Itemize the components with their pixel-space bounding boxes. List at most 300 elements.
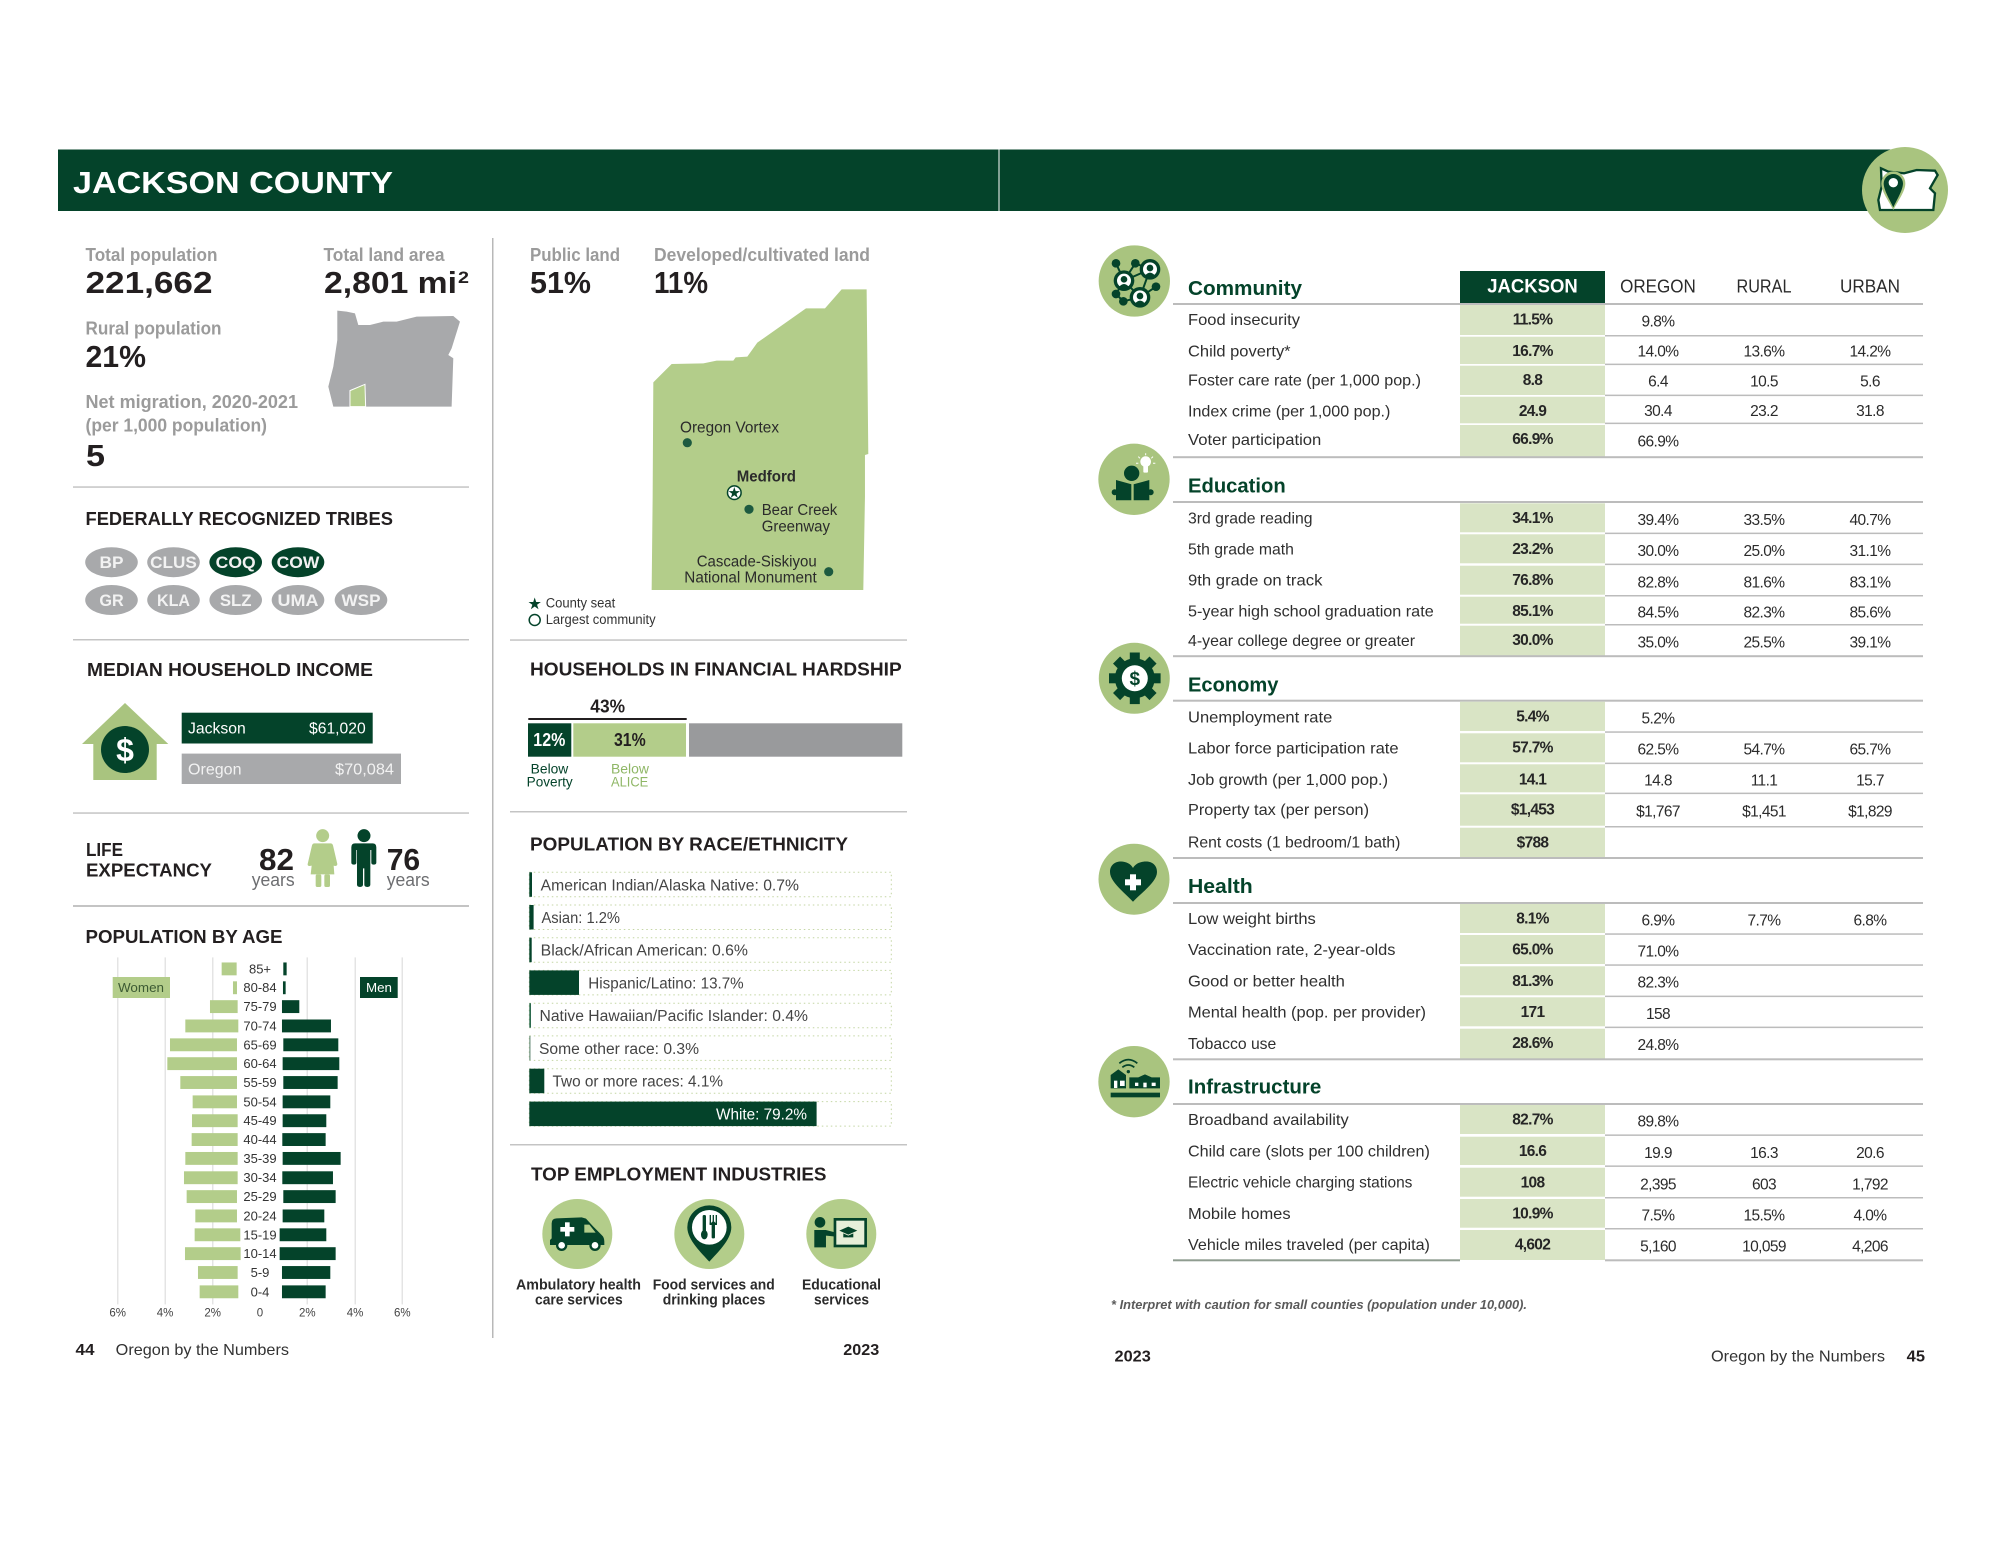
row: Index crime: 24.9 bbox=[1519, 403, 1547, 420]
table: column headers: RURAL bbox=[1736, 277, 1792, 297]
tribe pills: WSP bbox=[342, 591, 380, 610]
icon: gear with dollar: $ bbox=[1130, 669, 1141, 690]
row: Unemployment rate: Unemployment rate bbox=[1188, 709, 1332, 726]
stat: total population: 221,662 bbox=[86, 265, 212, 300]
row: Two or more races: Two or more races: 4.1% bbox=[552, 1074, 723, 1091]
row: high school graduation bbox=[1188, 597, 1923, 626]
row: Vehicle miles traveled bbox=[1173, 1230, 1923, 1261]
tribe pills bbox=[85, 547, 387, 615]
row: EV charging stations: 2,395 bbox=[1640, 1176, 1676, 1193]
row: Mental health: 171 bbox=[1521, 1004, 1545, 1021]
row: White bbox=[529, 1102, 891, 1126]
row: 9th grade on track: 76.8% bbox=[1512, 572, 1554, 589]
icon: reader with light bulb bbox=[1098, 444, 1170, 515]
row: Unemployment rate: 5.4% bbox=[1516, 709, 1550, 726]
title: JACKSON COUNTY bbox=[73, 165, 393, 200]
legend: men bbox=[360, 977, 398, 998]
row: Vaccination rate bbox=[1188, 935, 1923, 966]
age labels: 25-29 bbox=[243, 1189, 277, 1204]
row: college degree: 4-year college degree or greater bbox=[1188, 633, 1416, 650]
icon: gear with dollar bbox=[1099, 643, 1170, 714]
row: Foster care rate: 6.4 bbox=[1648, 374, 1669, 391]
map label: Cascade-Siskiyou National Monument: National Monument bbox=[684, 570, 817, 587]
row: Voter participation bbox=[1173, 425, 1923, 458]
row: Hispanic/Latino: Hispanic/Latino: 13.7% bbox=[588, 975, 744, 992]
x axis labels: 6% bbox=[109, 1308, 126, 1320]
row: Foster care rate: 8.8 bbox=[1523, 372, 1543, 389]
stat: total population bbox=[86, 245, 218, 300]
row: Child care: 16.6 bbox=[1519, 1143, 1547, 1160]
x axis labels: 2% bbox=[204, 1308, 221, 1320]
icon: teacher at board bbox=[806, 1199, 876, 1269]
stat: total land area: 2,801 mi bbox=[324, 265, 457, 300]
row: Voter participation: Voter participation bbox=[1188, 432, 1321, 449]
row: Vehicle miles traveled: 4,602 bbox=[1515, 1236, 1550, 1254]
heading: Health bbox=[1188, 876, 1253, 898]
stat: total land area bbox=[324, 245, 469, 300]
stat: net migration bbox=[86, 392, 298, 473]
row: Child poverty bbox=[1188, 337, 1923, 365]
row: Voter participation: 66.9% bbox=[1638, 434, 1679, 451]
row: Index crime: Index crime (per 1,000 pop.) bbox=[1188, 404, 1390, 421]
row: high school graduation: 82.3% bbox=[1744, 604, 1785, 621]
stat: public land: Public land bbox=[530, 245, 620, 265]
row: Tobacco use: 24.8% bbox=[1638, 1037, 1679, 1054]
icon: community network bbox=[1099, 245, 1170, 317]
age labels: 30-34 bbox=[243, 1170, 277, 1185]
row: Good or better health bbox=[1188, 966, 1923, 997]
total bracket 43%: 43% bbox=[590, 696, 625, 716]
row: Vaccination rate: 71.0% bbox=[1638, 944, 1679, 961]
row: 3rd grade reading: 34.1% bbox=[1512, 510, 1554, 527]
row: Child care bbox=[1188, 1137, 1923, 1167]
row: Labor force participation: Labor force participation rate bbox=[1188, 740, 1399, 757]
stat: rural population: Rural population bbox=[86, 318, 222, 338]
row: 3rd grade reading: 3rd grade reading bbox=[1188, 510, 1312, 527]
icon: fork and spoon pin bbox=[674, 1199, 744, 1269]
icon: house with dollar sign: $ bbox=[116, 732, 134, 768]
footer: left page year: 2023 bbox=[843, 1342, 879, 1359]
tribe pills: KLA bbox=[157, 591, 190, 610]
women life expectancy value: years bbox=[252, 870, 295, 890]
icon: Oregon map with location pin bbox=[1862, 147, 1948, 233]
row: Property tax: $1,453 bbox=[1511, 801, 1555, 818]
row: high school graduation: 85.6% bbox=[1850, 604, 1891, 621]
row: Some other race bbox=[529, 1036, 891, 1060]
icon: house with dollar sign bbox=[82, 703, 168, 780]
row: Index crime bbox=[1188, 397, 1923, 424]
row: Black/African American: Black/African American: 0.6% bbox=[541, 943, 748, 960]
stat: net migration: Net migration, 2020-2021 bbox=[86, 392, 298, 412]
row: 3rd grade reading: 39.4% bbox=[1638, 512, 1679, 529]
row: Labor force participation bbox=[1188, 733, 1923, 764]
age labels: 55-59 bbox=[243, 1075, 277, 1090]
map legend: County seat bbox=[546, 596, 616, 610]
row: EV charging stations: 1,792 bbox=[1852, 1176, 1888, 1193]
row: Broadband availability: 82.7% bbox=[1512, 1112, 1554, 1128]
men bars bbox=[280, 962, 341, 1298]
heading: POPULATION BY AGE bbox=[86, 926, 282, 947]
row: White: White: 79.2% bbox=[716, 1107, 807, 1124]
panel: population by race/ethnicity bbox=[529, 834, 891, 1126]
section: Community bbox=[1099, 245, 1923, 458]
row: high school graduation: 84.5% bbox=[1638, 604, 1679, 621]
row: Property tax: Property tax (per person) bbox=[1188, 802, 1369, 819]
row: Labor force participation: 54.7% bbox=[1744, 742, 1785, 759]
footer: left page number: 44 bbox=[76, 1342, 95, 1359]
heading: EXPECTANCY bbox=[86, 860, 213, 880]
women life expectancy value bbox=[252, 842, 295, 890]
row: Hispanic/Latino bbox=[529, 970, 891, 995]
row: high school graduation: 85.1% bbox=[1512, 603, 1554, 620]
row: Native Hawaiian/Pacific Islander bbox=[529, 1003, 891, 1028]
row: Child poverty: 14.2% bbox=[1850, 344, 1891, 361]
x axis labels: 0 bbox=[257, 1308, 263, 1320]
row: Labor force participation: 57.7% bbox=[1512, 740, 1554, 757]
row: Mental health: 158 bbox=[1646, 1006, 1670, 1023]
row: Rent costs bbox=[1173, 828, 1923, 859]
stat: rural population: 21% bbox=[86, 339, 146, 374]
table: column headers: OREGON bbox=[1620, 277, 1696, 297]
age labels: 70-74 bbox=[243, 1018, 277, 1034]
row: Food insecurity: 9.8% bbox=[1642, 314, 1675, 331]
age labels: 60-64 bbox=[243, 1056, 277, 1071]
row: 3rd grade reading: 33.5% bbox=[1744, 512, 1785, 529]
stat: total land area: 2 bbox=[458, 268, 469, 287]
row: EV charging stations: Electric vehicle charging stations bbox=[1188, 1175, 1412, 1192]
row: high school graduation: 5-year high school graduation rate bbox=[1188, 604, 1434, 621]
row: American Indian/Alaska Native: American Indian/Alaska Native: 0.7% bbox=[541, 878, 799, 894]
stat: rural population bbox=[86, 318, 222, 374]
map label: Oregon Vortex bbox=[680, 420, 779, 447]
men life expectancy value bbox=[387, 842, 430, 890]
panel: federally recognized tribes bbox=[85, 508, 393, 615]
women bars bbox=[167, 962, 241, 1298]
row: college degree bbox=[1173, 626, 1923, 657]
row: Foster care rate bbox=[1188, 366, 1923, 396]
age labels: 75-79 bbox=[243, 999, 277, 1014]
row: Tobacco use: Tobacco use bbox=[1188, 1036, 1276, 1053]
stat: developed land: Developed/cultivated land bbox=[654, 245, 870, 265]
tribe pills: BP bbox=[100, 553, 124, 572]
row: Black/African American bbox=[529, 938, 891, 962]
row: Job growth: 15.7 bbox=[1856, 773, 1884, 790]
bar: below ALICE: ALICE bbox=[611, 775, 648, 790]
row: Index crime: 31.8 bbox=[1856, 403, 1884, 420]
row: 3rd grade reading: 40.7% bbox=[1850, 512, 1891, 529]
legend: women bbox=[113, 977, 170, 998]
label: food services and drinking places bbox=[653, 1277, 775, 1308]
row: Mobile homes: 15.5% bbox=[1744, 1208, 1785, 1225]
footer: right page: 45 bbox=[1907, 1349, 1925, 1366]
map: Jackson County bbox=[652, 289, 868, 590]
row: Low weight births: Low weight births bbox=[1188, 911, 1316, 928]
heading: Community bbox=[1188, 278, 1303, 300]
table: column headers: URBAN bbox=[1840, 277, 1900, 297]
row: Child care: Child care (slots per 100 children) bbox=[1188, 1144, 1430, 1161]
row: Low weight births: 6.9% bbox=[1642, 913, 1675, 930]
stat: net migration: 5 bbox=[86, 438, 105, 473]
bar: Jackson income: Jackson bbox=[188, 720, 246, 738]
footer: left page number: Oregon by the Numbers bbox=[116, 1342, 289, 1359]
heading bbox=[86, 839, 213, 880]
age labels: 45-49 bbox=[243, 1113, 277, 1128]
row: EV charging stations bbox=[1188, 1168, 1923, 1198]
row: Child care: 19.9 bbox=[1644, 1145, 1672, 1162]
row: 5th grade math: 23.2% bbox=[1512, 541, 1554, 558]
x axis labels: 4% bbox=[157, 1308, 173, 1320]
row: college degree: 35.0% bbox=[1638, 634, 1679, 651]
row: Job growth: 11.1 bbox=[1751, 773, 1777, 790]
panel: households in financial hardship bbox=[527, 659, 902, 790]
tribe pills: CLUS bbox=[150, 553, 197, 572]
row: Job growth: 14.1 bbox=[1519, 771, 1547, 788]
tribe pills: COW bbox=[277, 553, 320, 572]
row: 3rd grade reading bbox=[1188, 503, 1923, 534]
row: Index crime: 23.2 bbox=[1750, 403, 1778, 420]
row: Labor force participation: 65.7% bbox=[1850, 742, 1891, 759]
row: Job growth: 14.8 bbox=[1644, 773, 1672, 790]
row: Child care: 16.3 bbox=[1750, 1145, 1778, 1162]
row: Mobile homes bbox=[1188, 1199, 1923, 1230]
stat: total land area: Total land area bbox=[324, 245, 445, 265]
row: Job growth bbox=[1188, 764, 1923, 794]
bar: below poverty: Below bbox=[531, 761, 569, 776]
panel: key county statistics bbox=[86, 245, 469, 473]
row: Job growth: Job growth (per 1,000 pop.) bbox=[1188, 772, 1388, 789]
row: Vehicle miles traveled: 10,059 bbox=[1742, 1239, 1786, 1256]
row: Child poverty: Child poverty* bbox=[1188, 344, 1291, 361]
age labels: 40-44 bbox=[243, 1132, 277, 1147]
footnote: * Interpret with caution for small counties (population under 10,000). bbox=[1111, 1297, 1527, 1312]
stat: developed land bbox=[654, 245, 870, 300]
row: Low weight births bbox=[1188, 904, 1923, 935]
age labels: 50-54 bbox=[243, 1094, 277, 1109]
row: Mobile homes: 10.9% bbox=[1512, 1206, 1554, 1222]
row: Property tax: $1,767 bbox=[1636, 804, 1680, 821]
section: Economy bbox=[1099, 643, 1923, 859]
row: college degree: 30.0% bbox=[1512, 632, 1554, 649]
age labels: 5-9 bbox=[251, 1265, 269, 1280]
map label: Medford county seat bbox=[728, 469, 796, 500]
map label: Bear Creek Greenway: Bear Creek bbox=[762, 502, 838, 519]
row: college degree: 25.5% bbox=[1744, 634, 1785, 651]
heading: Economy bbox=[1188, 675, 1279, 697]
women life expectancy value: 82 bbox=[259, 842, 294, 877]
map label: Oregon Vortex: Oregon Vortex bbox=[680, 420, 779, 437]
row: Tobacco use bbox=[1173, 1029, 1923, 1060]
men life expectancy value: years bbox=[387, 870, 430, 890]
bar: below ALICE: 31% bbox=[614, 730, 646, 750]
label: ambulatory health care services: care services bbox=[535, 1292, 623, 1308]
label: food services and drinking places: drinking places bbox=[663, 1292, 765, 1308]
row: Low weight births: 8.1% bbox=[1516, 911, 1550, 928]
bar: below ALICE bbox=[573, 723, 686, 790]
bar: below poverty: Poverty bbox=[527, 775, 573, 790]
row: American Indian/Alaska Native bbox=[529, 872, 891, 897]
legend: women: Women bbox=[118, 980, 164, 995]
label: ambulatory health care services: Ambulatory health bbox=[516, 1277, 641, 1293]
row: Asian bbox=[529, 905, 891, 930]
age labels: 15-19 bbox=[243, 1227, 277, 1242]
men life expectancy value: 76 bbox=[387, 842, 420, 877]
x axis labels bbox=[109, 1308, 411, 1320]
heading: HOUSEHOLDS IN FINANCIAL HARDSHIP bbox=[530, 659, 902, 680]
row: Child poverty: 14.0% bbox=[1638, 344, 1679, 361]
bar: below poverty bbox=[527, 723, 573, 790]
icon: heart with cross bbox=[1098, 844, 1170, 915]
panel: top employment industries bbox=[516, 1164, 881, 1308]
map label: Cascade-Siskiyou National Monument bbox=[684, 554, 833, 587]
row: Voter participation: 66.9% bbox=[1512, 431, 1554, 448]
row: Mental health: Mental health (pop. per provider) bbox=[1188, 1005, 1426, 1022]
row: Some other race: Some other race: 0.3% bbox=[539, 1041, 699, 1058]
stat: total population: Total population bbox=[86, 245, 218, 265]
row: Tobacco use: 28.6% bbox=[1512, 1035, 1554, 1052]
row: Foster care rate: 10.5 bbox=[1750, 374, 1778, 391]
row: Broadband availability: Broadband availability bbox=[1188, 1112, 1349, 1129]
bar: below ALICE: Below bbox=[611, 761, 649, 776]
row: Foster care rate: 5.6 bbox=[1860, 374, 1880, 391]
table: column headers: JACKSON bbox=[1487, 277, 1578, 298]
icon: man bbox=[351, 829, 376, 887]
x axis labels: 6% bbox=[394, 1308, 411, 1320]
icon: ambulance bbox=[542, 1199, 612, 1269]
bar: Jackson income bbox=[182, 713, 373, 744]
row: Good or better health: Good or better health bbox=[1188, 974, 1345, 991]
icon: woman bbox=[308, 829, 337, 887]
row: Food insecurity: 11.5% bbox=[1513, 311, 1553, 328]
legend: men: Men bbox=[366, 980, 392, 995]
map legend bbox=[529, 596, 656, 627]
age labels bbox=[243, 962, 277, 1299]
row: Unemployment rate bbox=[1188, 702, 1923, 733]
x axis labels: 4% bbox=[347, 1308, 363, 1320]
bar: Jackson income: $61,020 bbox=[309, 720, 366, 738]
bar: Oregon income: Oregon bbox=[188, 762, 242, 778]
tribe pills: UMA bbox=[278, 591, 318, 610]
heading: FEDERALLY RECOGNIZED TRIBES bbox=[86, 508, 393, 529]
label: educational services bbox=[802, 1277, 881, 1308]
row: Foster care rate: Foster care rate (per 1,000 pop.) bbox=[1188, 373, 1421, 390]
map label: Bear Creek Greenway bbox=[744, 502, 838, 536]
row: Food insecurity: Food insecurity bbox=[1188, 312, 1300, 329]
label: educational services: Educational bbox=[802, 1277, 881, 1293]
row: 9th grade on track: 9th grade on track bbox=[1188, 573, 1323, 590]
age labels: 35-39 bbox=[243, 1151, 277, 1166]
row: Two or more races bbox=[529, 1069, 891, 1093]
section: Health bbox=[1098, 844, 1923, 1060]
row: 5th grade math: 5th grade math bbox=[1188, 541, 1294, 558]
age labels: 0-4 bbox=[251, 1284, 269, 1299]
row: 9th grade on track bbox=[1188, 566, 1923, 596]
row: 5th grade math: 31.1% bbox=[1850, 543, 1891, 560]
row: Food insecurity bbox=[1188, 305, 1923, 336]
age labels: 85+ bbox=[249, 962, 271, 976]
row: Vehicle miles traveled: Vehicle miles traveled (per capita) bbox=[1188, 1237, 1430, 1254]
bar: Oregon income bbox=[182, 754, 401, 784]
footer: right page: Oregon by the Numbers bbox=[1711, 1349, 1885, 1366]
panel: population by age bbox=[86, 926, 411, 1320]
chart: population pyramid bars bbox=[167, 962, 341, 1298]
row: Broadband availability: 89.8% bbox=[1638, 1114, 1679, 1131]
footer: right page: 2023 bbox=[1114, 1349, 1151, 1366]
bar: below poverty: 12% bbox=[533, 730, 565, 750]
stat: public land: 51% bbox=[530, 265, 591, 300]
x axis labels: 2% bbox=[299, 1308, 316, 1320]
header banner bbox=[58, 150, 1896, 211]
row: 9th grade on track: 82.8% bbox=[1638, 574, 1679, 591]
age labels: 65-69 bbox=[243, 1037, 277, 1052]
row: Unemployment rate: 5.2% bbox=[1642, 710, 1675, 727]
row: Property tax: $1,829 bbox=[1848, 804, 1892, 821]
row: Mobile homes: Mobile homes bbox=[1188, 1206, 1291, 1223]
panel: land use bbox=[529, 245, 870, 627]
row: Vaccination rate: 65.0% bbox=[1512, 942, 1554, 959]
row: Child poverty: 16.7% bbox=[1512, 343, 1554, 360]
row: Low weight births: 6.8% bbox=[1854, 913, 1887, 930]
row: Good or better health: 82.3% bbox=[1638, 975, 1679, 992]
row: Index crime: 30.4 bbox=[1644, 403, 1673, 420]
panel: life expectancy bbox=[86, 829, 430, 890]
panel: median household income bbox=[82, 659, 401, 784]
table: column headers bbox=[1460, 271, 1900, 303]
map label: Medford county seat: Medford bbox=[737, 469, 796, 486]
row: Vehicle miles traveled: 4,206 bbox=[1852, 1239, 1888, 1256]
section: Infrastructure bbox=[1098, 1046, 1923, 1261]
stat: net migration: (per 1,000 population) bbox=[86, 416, 267, 436]
heading: POPULATION BY RACE/ETHNICITY bbox=[530, 834, 849, 855]
section: Education bbox=[1098, 444, 1923, 657]
tribe pills: GR bbox=[99, 591, 124, 610]
row: Vaccination rate: Vaccination rate, 2-year-olds bbox=[1188, 942, 1395, 959]
age labels: 80-84 bbox=[243, 980, 277, 995]
map label: Cascade-Siskiyou National Monument: Cascade-Siskiyou bbox=[697, 554, 817, 571]
row: EV charging stations: 108 bbox=[1521, 1174, 1545, 1191]
age labels: 10-14 bbox=[243, 1246, 277, 1261]
row: Child care: 20.6 bbox=[1856, 1145, 1884, 1162]
bar: remainder bbox=[689, 723, 902, 757]
label: educational services: services bbox=[814, 1292, 869, 1308]
row: 5th grade math bbox=[1188, 534, 1923, 565]
footer: right page bbox=[1114, 1349, 1925, 1366]
bar: Oregon income: $70,084 bbox=[335, 762, 394, 778]
row: college degree: 39.1% bbox=[1850, 634, 1891, 651]
row: Native Hawaiian/Pacific Islander: Native Hawaiian/Pacific Islander: 0.4% bbox=[540, 1008, 808, 1025]
age labels: 20-24 bbox=[243, 1208, 277, 1224]
row: Rent costs: Rent costs (1 bedroom/1 bath) bbox=[1188, 834, 1400, 851]
row: Mobile homes: 4.0% bbox=[1854, 1208, 1887, 1225]
row: Labor force participation: 62.5% bbox=[1638, 742, 1679, 759]
heading: TOP EMPLOYMENT INDUSTRIES bbox=[531, 1164, 826, 1185]
label: ambulatory health care services bbox=[516, 1277, 641, 1308]
row: 9th grade on track: 81.6% bbox=[1744, 574, 1785, 591]
row: Mobile homes: 7.5% bbox=[1642, 1208, 1675, 1225]
row: 5th grade math: 25.0% bbox=[1744, 543, 1785, 560]
row: 5th grade math: 30.0% bbox=[1638, 543, 1679, 560]
heading: MEDIAN HOUSEHOLD INCOME bbox=[87, 659, 373, 680]
heading: Infrastructure bbox=[1188, 1076, 1321, 1098]
icon: connected buildings bbox=[1098, 1046, 1170, 1117]
map label: Bear Creek Greenway: Greenway bbox=[762, 519, 830, 536]
tribe pills: COQ bbox=[216, 553, 256, 572]
heading: Education bbox=[1188, 475, 1286, 497]
heading: LIFE bbox=[86, 839, 123, 860]
row: Broadband availability bbox=[1188, 1105, 1923, 1136]
row: Vehicle miles traveled: 5,160 bbox=[1640, 1239, 1677, 1256]
row: Mental health bbox=[1188, 997, 1923, 1028]
row: Property tax: $1,451 bbox=[1742, 804, 1786, 821]
